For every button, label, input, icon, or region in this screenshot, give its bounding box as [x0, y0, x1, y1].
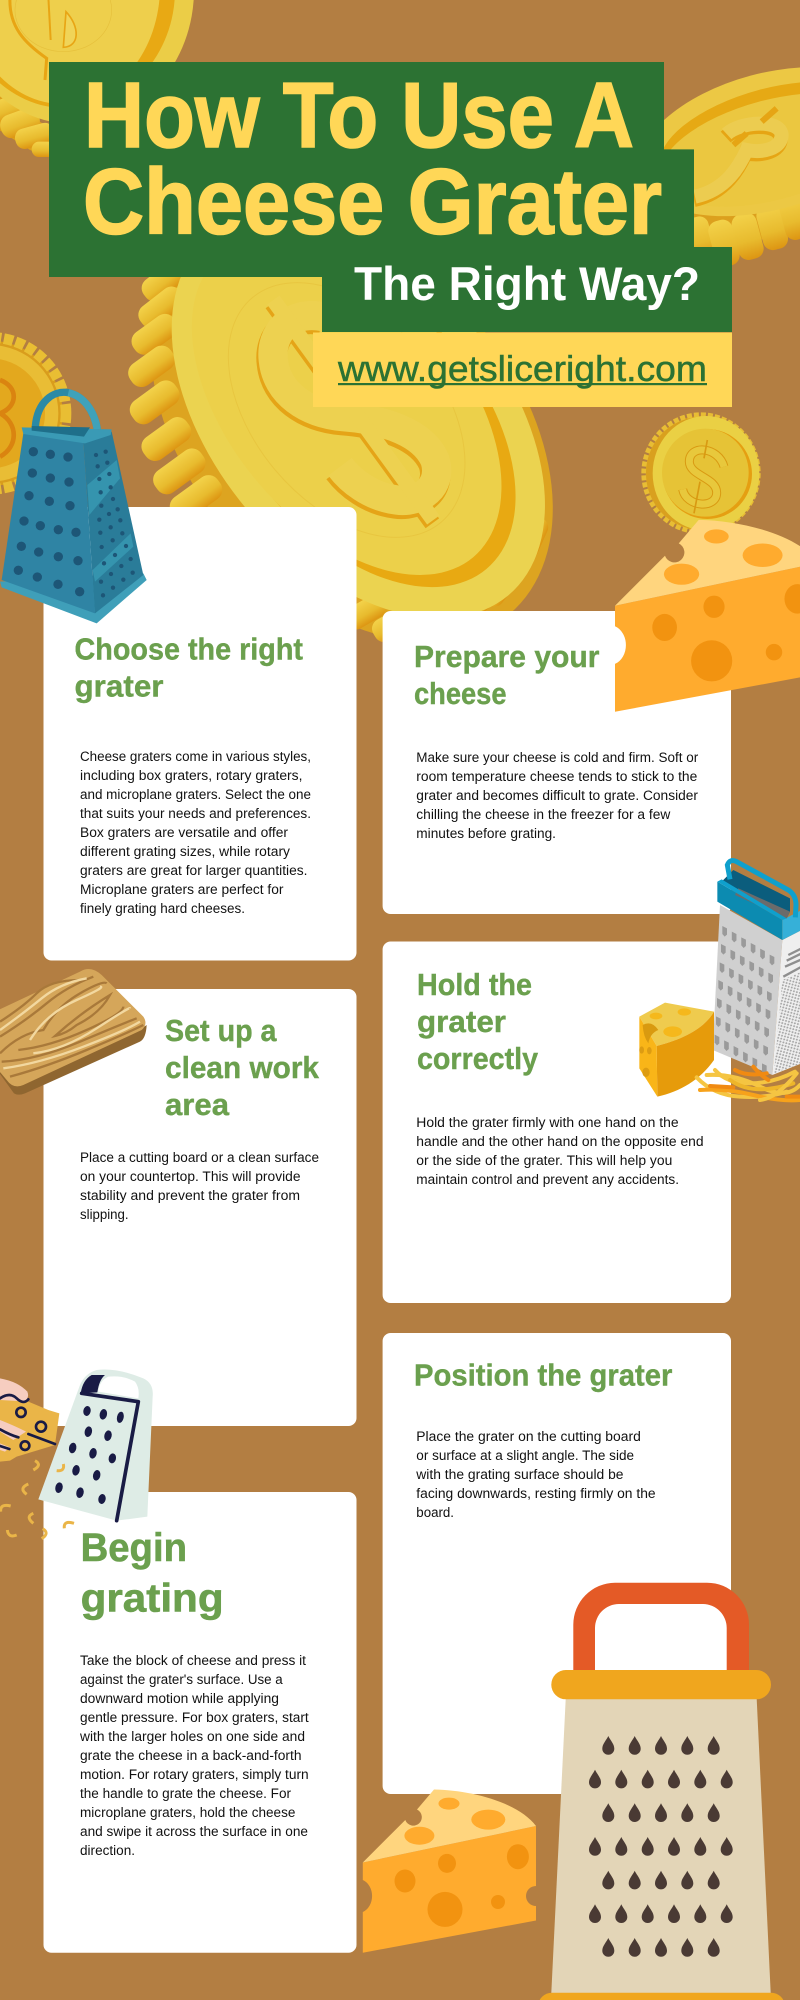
icon: flat grater with cheese: [0, 1369, 153, 1539]
text: prepare: chilling the cheese in the freezer for a few: [416, 807, 671, 822]
text: set up: on your countertop. This will provide: [80, 1169, 300, 1184]
text: choose: graters are great for larger quantities.: [80, 863, 308, 878]
icon: large gold coin: [69, 134, 634, 719]
text: prepare: grater and becomes difficult to grate. Consider: [416, 788, 699, 803]
text: begin: grate the cheese in a back-and-forth: [80, 1748, 302, 1763]
text: begin: the handle to grate the cheese. For: [80, 1786, 292, 1801]
panel: hold the grater correctly: [383, 942, 731, 1303]
heading: set up: clean work: [165, 1050, 320, 1085]
text: position: Place the grater on the cutting board: [416, 1429, 641, 1444]
text: choose: finely grating hard cheeses.: [80, 901, 245, 916]
grater body: [551, 1699, 771, 1993]
text: begin: direction.: [80, 1843, 135, 1858]
text: hold: maintain control and prevent any accidents.: [416, 1172, 679, 1187]
text: choose: Microplane graters are perfect for: [80, 882, 284, 897]
icon: gold coin top right: [622, 41, 800, 269]
text: prepare: room temperature cheese tends to stick to the: [416, 769, 697, 784]
text: choose: and microplane graters. Select the one: [80, 787, 311, 802]
top collar: [551, 1670, 771, 1699]
icon: cheese wedge top right: [615, 520, 800, 712]
text: choose: that suits your needs and preferences.: [80, 806, 311, 821]
text: begin: microplane graters, hold the cheese: [80, 1805, 295, 1820]
heading: set up: Set up a: [165, 1013, 277, 1048]
text: begin: Take the block of cheese and press it: [80, 1653, 306, 1668]
panel: prepare your cheese: [383, 611, 731, 914]
text: set up: Place a cutting board or a clean surface: [80, 1150, 319, 1165]
heading: position: Position the grater: [414, 1358, 672, 1393]
subtitle: The Right Way?: [354, 257, 700, 310]
icon: small gold coin right: [644, 415, 759, 532]
text: position: board.: [416, 1505, 454, 1520]
handle: [573, 1583, 749, 1670]
text: begin: downward motion while applying: [80, 1691, 279, 1706]
cheese crumbs: [1, 1461, 74, 1539]
bottom collar: [538, 1993, 785, 2000]
text: hold: Hold the grater firmly with one hand on the: [416, 1115, 679, 1130]
title line 1: How To Use A: [84, 63, 634, 167]
text: choose: Cheese graters come in various styles,: [80, 749, 311, 764]
heading: set up: [165, 1013, 320, 1122]
text: choose: different grating sizes, while rotary: [80, 844, 290, 859]
text: begin: gentle pressure. For box graters, start: [80, 1710, 309, 1725]
heading: prepare: Prepare your: [414, 639, 600, 674]
text: set up: [80, 1150, 319, 1222]
icon: steel grater with blue top: [713, 861, 800, 1075]
heading: choose: Choose the right: [74, 632, 303, 666]
heading: hold: [417, 967, 539, 1076]
panel: choose the right grater: [44, 507, 356, 960]
text: hold: or the side of the grater. This will help you: [416, 1153, 672, 1168]
icon: cheese wedge bottom: [363, 1790, 536, 1953]
heading: begin: grating: [81, 1577, 224, 1621]
icon: gold coin left: [0, 337, 66, 489]
heading: begin: Begin: [81, 1526, 187, 1570]
icon: gold coin top left: [0, 0, 194, 157]
text: choose: Box graters are versatile and offer: [80, 825, 289, 840]
icon: grated cheese shreds: [697, 1067, 800, 1100]
text: hold: handle and the other hand on the opposite end: [416, 1134, 704, 1149]
panel: position the grater: [383, 1333, 731, 1794]
text: set up: slipping.: [80, 1207, 129, 1222]
grater holes: [589, 1736, 733, 1957]
heading: hold: Hold the: [417, 967, 532, 1002]
text: position: [415, 1429, 656, 1520]
heading: prepare: [414, 639, 600, 711]
text: begin: with the larger holes on one side and: [79, 1729, 305, 1744]
text: hold: [416, 1115, 704, 1187]
text: position: with the grating surface should be: [415, 1467, 624, 1482]
text: position: facing downwards, resting firmly on the: [416, 1486, 656, 1501]
panel: set up a clean work area: [44, 989, 356, 1426]
heading: hold: correctly: [417, 1041, 539, 1076]
panel: begin grating: [44, 1492, 356, 1953]
text: prepare: Make sure your cheese is cold and firm. Soft or: [416, 750, 699, 765]
text: prepare: minutes before grating.: [416, 826, 556, 841]
icon: blue box grater: [0, 392, 147, 623]
hand and cheese: [0, 1378, 59, 1462]
heading: prepare: cheese: [414, 676, 506, 711]
text: begin: against the grater's surface. Use a: [80, 1672, 283, 1687]
heading: choose: grater: [74, 668, 164, 704]
icon: orange handled grater: [538, 1583, 785, 2000]
text: position: or surface at a slight angle. The side: [416, 1448, 634, 1463]
icon: cheese wedge small: [639, 1003, 714, 1097]
text: set up: stability and prevent the grater from: [80, 1188, 300, 1203]
heading: set up: area: [165, 1087, 230, 1122]
website banner: [313, 332, 732, 407]
text: begin: and swipe it across the surface in one: [80, 1824, 308, 1839]
title block: [49, 62, 732, 332]
icon: wooden cutting board: [0, 969, 147, 1095]
heading: choose: [74, 632, 303, 704]
title background: [49, 62, 732, 332]
text: begin: motion. For rotary graters, simply turn: [80, 1767, 309, 1782]
heading: begin: [81, 1526, 224, 1621]
text: prepare: [416, 750, 699, 841]
website banner: www.getsliceright.com: [337, 348, 707, 389]
text: begin: [79, 1653, 309, 1858]
text: choose: including box graters, rotary graters,: [80, 768, 302, 783]
text: choose: [80, 749, 311, 916]
heading: hold: grater: [417, 1004, 506, 1039]
title line 2: Cheese Grater: [83, 150, 662, 254]
